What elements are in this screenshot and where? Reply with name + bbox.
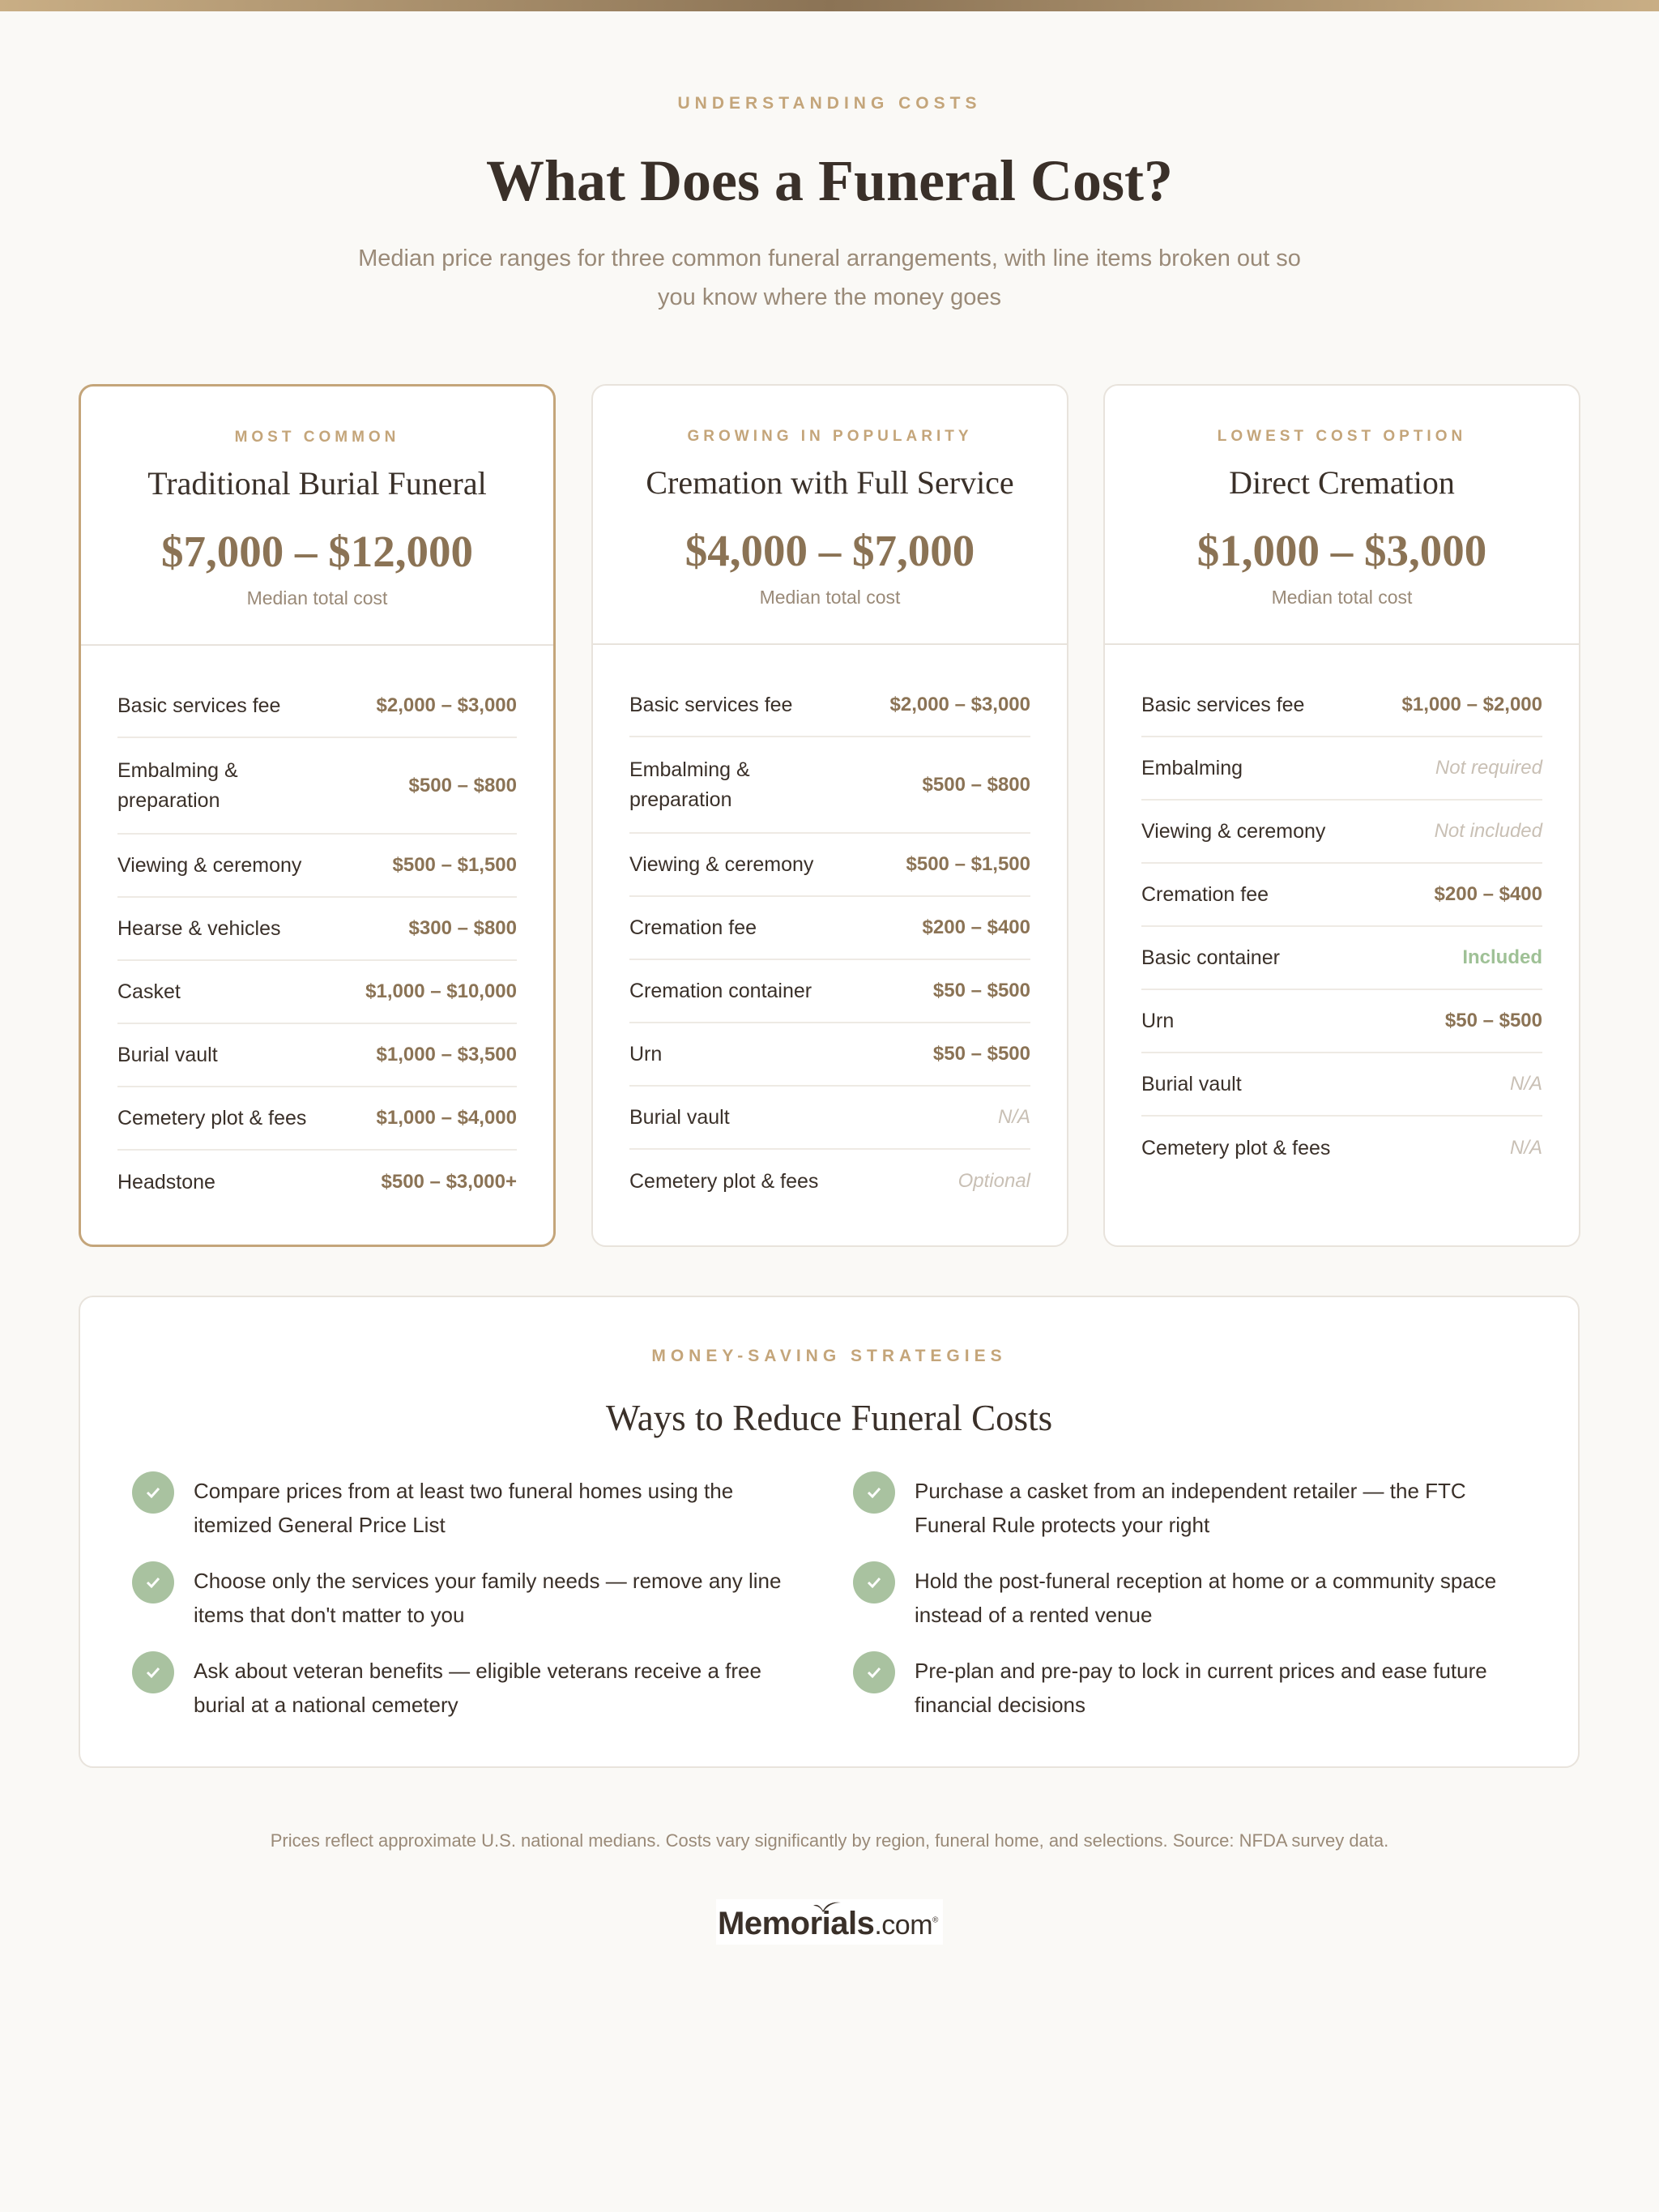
card header [646, 428, 1014, 608]
line items: Cremation fee [629, 916, 757, 938]
line items: N/A [1510, 1073, 1542, 1095]
panel: direct cremation [1103, 384, 1580, 1247]
line items: Cemetery plot & fees [117, 1107, 306, 1129]
line items: $300 – $800 [409, 917, 517, 939]
panel: direct cremation: $1,000 – $3,000 [1197, 526, 1486, 575]
line items: $1,000 – $3,500 [376, 1044, 517, 1065]
line items: Headstone [117, 1170, 215, 1193]
line items: $2,000 – $3,000 [889, 694, 1030, 715]
icon: bird [813, 1902, 841, 1912]
line items: Cemetery plot & fees [629, 1170, 818, 1193]
line items: Basic services fee [117, 694, 280, 716]
line items: $500 – $3,000+ [381, 1171, 517, 1193]
subtitle: Median price ranges for three common funeral arrangements, with line items broken out so you know where the money goes [358, 246, 1301, 310]
panel: cremation with full service: Median total cost [760, 587, 900, 608]
line items: Hearse & vehicles [117, 917, 280, 940]
line items [629, 694, 1030, 1193]
eyebrow: MONEY-SAVING STRATEGIES [651, 1347, 1007, 1365]
line items: Urn [629, 1042, 662, 1065]
top gradient bar [0, 0, 1659, 11]
line items: $50 – $500 [1445, 1010, 1542, 1031]
line items: $1,000 – $4,000 [376, 1107, 517, 1129]
line items: Basic container [1141, 946, 1280, 969]
line items: Embalming & [117, 758, 238, 781]
tip 1: Compare prices from at least two funeral homes using the itemized General Price List [194, 1479, 733, 1537]
panel: money-saving strategies [79, 1296, 1580, 1768]
line items: Burial vault [629, 1105, 730, 1128]
line items [1141, 694, 1543, 1159]
line items: $50 – $500 [933, 1043, 1030, 1065]
line items: Burial vault [1141, 1073, 1242, 1095]
line items: preparation [629, 788, 731, 810]
line items: Viewing & ceremony [117, 854, 301, 877]
panel: cremation with full service [591, 384, 1068, 1247]
panel: traditional burial: Traditional Burial Funeral [147, 465, 487, 502]
logo: Memorials.com® [718, 1906, 938, 1941]
tip 4: Hold the post-funeral reception at home or a community space instead of a rented venue [915, 1569, 1496, 1627]
line items: Cemetery plot & fees [1141, 1136, 1330, 1159]
panel: traditional burial: MOST COMMON [235, 429, 399, 446]
panel: traditional burial: $7,000 – $12,000 [161, 527, 473, 576]
card header [147, 429, 487, 609]
panel: direct cremation: Direct Cremation [1229, 464, 1455, 501]
line items: Optional [958, 1170, 1030, 1192]
line items: $500 – $800 [923, 774, 1030, 796]
line items: Not included [1435, 820, 1542, 842]
tip 5: Ask about veteran benefits — eligible veterans receive a free burial at a national cemetery [194, 1659, 761, 1717]
panel: cremation with full service: GROWING IN POPULARITY [687, 428, 972, 445]
tip 2: Purchase a casket from an independent retailer — the FTC Funeral Rule protects your right [915, 1479, 1466, 1537]
line items: Basic services fee [1141, 694, 1304, 716]
line items: Embalming [1141, 757, 1243, 779]
line items: Burial vault [117, 1044, 218, 1066]
panel: cremation with full service: $4,000 – $7,000 [685, 526, 975, 575]
line items: Urn [1141, 1010, 1174, 1032]
line items: Basic services fee [629, 694, 792, 716]
line items: $200 – $400 [1435, 883, 1542, 905]
line items: Embalming & [629, 758, 750, 781]
eyebrow: understanding costs: UNDERSTANDING COSTS [678, 94, 981, 113]
line items: preparation [117, 789, 220, 812]
heading: Ways to Reduce Funeral Costs [606, 1398, 1052, 1438]
line items: $2,000 – $3,000 [376, 694, 517, 716]
line items: $500 – $1,500 [906, 853, 1030, 875]
line items: $50 – $500 [933, 980, 1030, 1001]
panel: direct cremation: Median total cost [1272, 587, 1412, 608]
line items: Cremation container [629, 979, 812, 1001]
line items: N/A [998, 1106, 1030, 1128]
footnote: Prices reflect approximate U.S. national medians. Costs vary significantly by region, funeral home, and selections. Source: NFDA survey data. [271, 1830, 1388, 1851]
line items: Not required [1435, 757, 1542, 779]
panel: cremation with full service: Cremation with Full Service [646, 464, 1014, 501]
panel: traditional burial [79, 384, 556, 1247]
line items: Cremation fee [1141, 883, 1269, 906]
line items: $500 – $1,500 [393, 854, 517, 876]
tip 3: Choose only the services your family needs — remove any line items that don't matter to you [194, 1569, 781, 1627]
line items: $1,000 – $10,000 [365, 980, 517, 1002]
line items: $500 – $800 [409, 775, 517, 796]
title: What Does a Funeral Cost? [486, 148, 1173, 213]
card header [1197, 428, 1486, 608]
line items [117, 694, 517, 1193]
line items: $200 – $400 [923, 916, 1030, 938]
line items: Casket [117, 980, 181, 1003]
line items: $1,000 – $2,000 [1401, 694, 1542, 715]
line items: Included [1462, 946, 1542, 968]
tip 6: Pre-plan and pre-pay to lock in current prices and ease future financial decisions [915, 1659, 1487, 1717]
line items: Viewing & ceremony [629, 852, 813, 875]
panel: traditional burial: Median total cost [247, 587, 387, 609]
line items: N/A [1510, 1137, 1542, 1159]
line items: Viewing & ceremony [1141, 820, 1325, 843]
panel: direct cremation: LOWEST COST OPTION [1218, 428, 1466, 445]
